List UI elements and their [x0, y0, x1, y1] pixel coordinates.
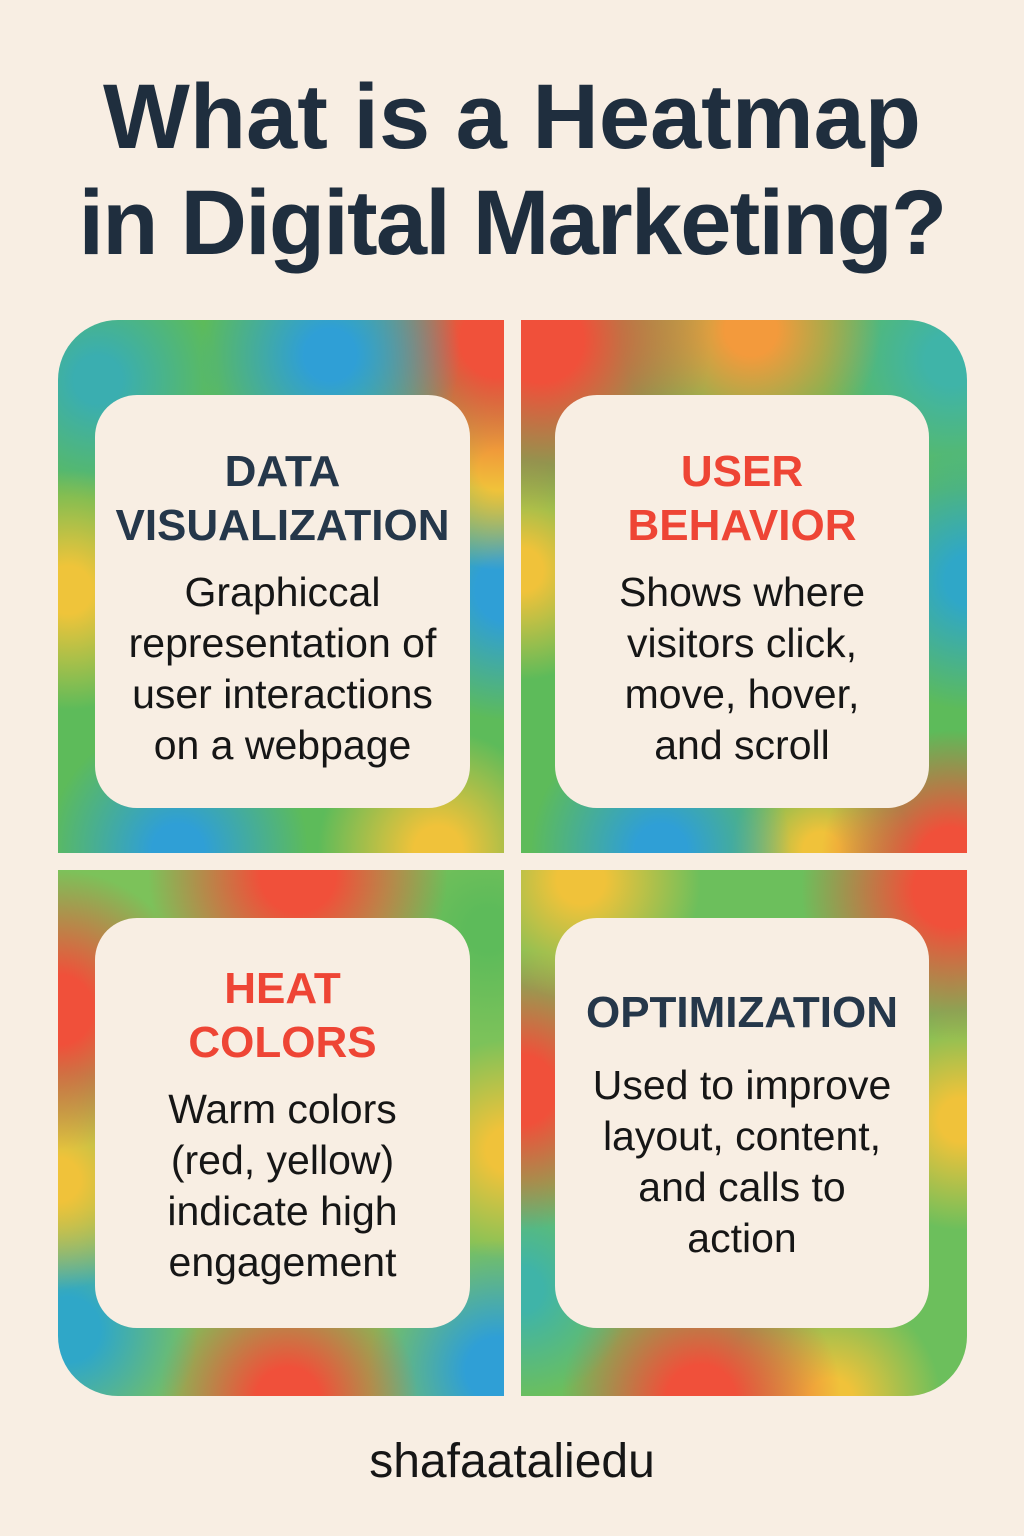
- body text: move, hover,: [625, 671, 859, 717]
- title: in Digital Marketing?: [79, 172, 945, 274]
- title: What is a Heatmap: [103, 66, 921, 168]
- card: [555, 918, 929, 1328]
- body text: [167, 1086, 398, 1285]
- heading: OPTIMIZATION: [586, 988, 898, 1037]
- body text: Used to improve: [593, 1062, 891, 1108]
- body text: indicate high: [167, 1188, 398, 1234]
- card: [555, 395, 929, 808]
- heading: HEAT: [224, 964, 341, 1013]
- heading: [188, 964, 377, 1067]
- body text: layout, content,: [603, 1113, 881, 1159]
- body text: visitors click,: [627, 620, 857, 666]
- body text: [593, 1062, 891, 1261]
- body text: on a webpage: [154, 722, 411, 768]
- panel: heat colors: [58, 870, 504, 1396]
- heading: BEHAVIOR: [628, 501, 856, 550]
- panel: data visualization: [58, 320, 504, 853]
- body text: representation of: [129, 620, 436, 666]
- heading: [115, 447, 450, 550]
- heading: [628, 447, 856, 550]
- card: [95, 395, 470, 808]
- body text: and calls to: [638, 1164, 846, 1210]
- body text: Graphiccal: [184, 569, 380, 615]
- body text: Shows where: [619, 569, 865, 615]
- body text: user interactions: [132, 671, 433, 717]
- heading: VISUALIZATION: [115, 501, 450, 550]
- heading: DATA: [225, 447, 340, 496]
- heading: COLORS: [188, 1018, 377, 1067]
- panel: user behavior: [521, 320, 967, 853]
- title: [79, 66, 945, 274]
- footer: shafaataliedu: [369, 1435, 655, 1488]
- panel: optimization: [521, 870, 967, 1396]
- body text: engagement: [169, 1239, 396, 1285]
- body text: [619, 569, 865, 768]
- body text: and scroll: [654, 722, 830, 768]
- heading: USER: [681, 447, 803, 496]
- card: [95, 918, 470, 1328]
- body text: Warm colors: [168, 1086, 397, 1132]
- body text: [129, 569, 436, 768]
- body text: action: [687, 1215, 797, 1261]
- body text: (red, yellow): [171, 1137, 394, 1183]
